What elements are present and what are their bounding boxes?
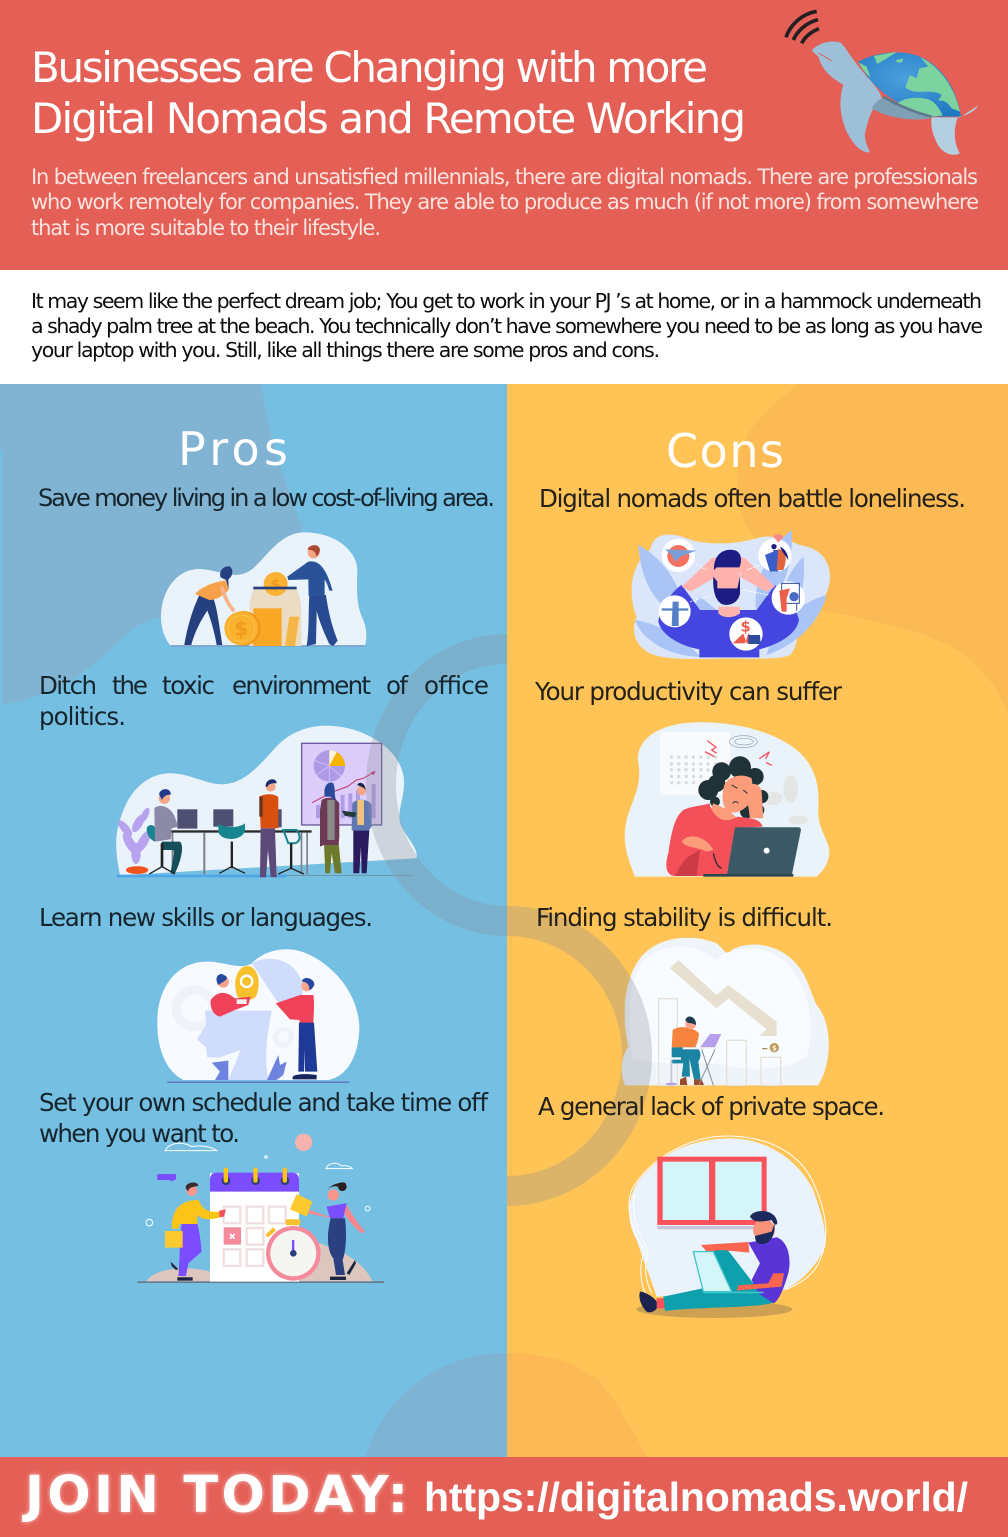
large dollar coin: $ bbox=[234, 617, 248, 641]
gears bbox=[177, 990, 291, 1045]
text: pro 2: Ditch bbox=[39, 671, 97, 700]
text block: header intro: In between freelancers and unsatisfied millennials, there are digital nomads. There are professionals bbox=[31, 165, 978, 189]
text block: dream job paragraph: your laptop with you. Still, like all things there are some pros and cons. bbox=[31, 338, 660, 362]
dollar coin: $ bbox=[772, 1043, 777, 1052]
man holding head bbox=[658, 550, 799, 657]
text: pro 4 bbox=[39, 1088, 489, 1148]
standing man bbox=[259, 779, 278, 877]
illustration: loneliness stressed man: $ bbox=[741, 619, 751, 636]
jar of coins: $ bbox=[271, 576, 281, 593]
dollar coin bbox=[762, 1043, 779, 1052]
call to action: join today: JOIN TODAY: bbox=[22, 1466, 408, 1525]
text: pro 2: office bbox=[424, 671, 489, 700]
woman with folder bbox=[290, 1182, 365, 1280]
woman figure bbox=[666, 756, 768, 876]
text: pro 2: toxic bbox=[162, 671, 215, 700]
woman pushing coin bbox=[184, 566, 234, 645]
falling arrow bbox=[670, 960, 777, 1036]
heading: Pros: Pros bbox=[178, 422, 288, 476]
panel: footer banner bbox=[0, 1457, 1008, 1537]
man dropping coin bbox=[287, 545, 338, 646]
decorative S-shaped ring bbox=[381, 649, 637, 1191]
stopwatch bbox=[265, 1219, 321, 1281]
text block: dream job paragraph: It may seem like the perfect dream job; You get to work in your PJ ’s at home, or in a hammock underneath bbox=[31, 289, 982, 313]
curly hair bbox=[698, 756, 768, 818]
icon: turtle with globe shell bbox=[786, 11, 978, 155]
text: pro 4: when you want to. bbox=[39, 1119, 240, 1148]
text: pro 2: environment bbox=[232, 671, 371, 700]
text: pro 2: the bbox=[112, 671, 148, 700]
text: pro 2: politics. bbox=[39, 702, 126, 731]
wall calendar bbox=[660, 732, 730, 795]
calendar bbox=[210, 1168, 299, 1282]
illustration: office politics team bbox=[116, 726, 417, 877]
panel: cons column bbox=[507, 384, 1008, 1457]
illustration: saving money jar bbox=[161, 532, 366, 646]
potted plant bbox=[116, 806, 154, 874]
man with laptop bbox=[639, 1211, 790, 1312]
man with tablet bbox=[342, 783, 372, 873]
panel: pros column bbox=[0, 384, 507, 1457]
large dollar coin bbox=[224, 611, 261, 646]
text block: dream job paragraph: a shady palm tree at the beach. You technically don’t have somewhere you need to be as long as you have bbox=[31, 314, 983, 338]
lightbulb bbox=[235, 966, 259, 999]
text block: dream job paragraph bbox=[31, 289, 983, 362]
title bbox=[31, 43, 746, 143]
text block: header intro: who work remotely for companies. They are able to produce as much (if not more) from somewhere bbox=[31, 190, 979, 214]
window bbox=[657, 1157, 767, 1229]
balloon shape bbox=[252, 959, 303, 1017]
whiteboard with charts bbox=[302, 743, 382, 825]
worried person at desk bbox=[664, 1016, 721, 1085]
text block: header intro bbox=[31, 165, 979, 240]
panel: header banner bbox=[0, 0, 1008, 270]
bar outlines bbox=[659, 999, 781, 1085]
panel: intro paragraph background bbox=[0, 270, 1008, 384]
illustration: schedule calendar and clock bbox=[137, 1134, 384, 1283]
stress bubbles bbox=[659, 539, 805, 651]
illustration: loneliness stressed man bbox=[632, 530, 830, 659]
wifi signal arcs bbox=[786, 11, 819, 43]
text block: header intro: that is more suitable to their lifestyle. bbox=[31, 216, 381, 240]
man pointing bbox=[165, 1183, 226, 1281]
text: pro 3: Learn new skills or languages. bbox=[39, 903, 373, 932]
illustration: head with light bulb bbox=[157, 949, 359, 1083]
seated worker bbox=[147, 789, 182, 874]
call to action: join today: JOIN TODAY: bbox=[22, 1466, 408, 1525]
man holding head top bbox=[276, 978, 317, 1079]
laptop bbox=[703, 827, 801, 877]
illustration: exhausted woman at laptop bbox=[625, 722, 829, 877]
text: pro 2 bbox=[39, 671, 489, 731]
text: pro 2: of bbox=[386, 671, 409, 700]
text: con 4: A general lack of private space. bbox=[538, 1092, 885, 1121]
text: con 1: Digital nomads often battle loneliness. bbox=[539, 484, 966, 513]
speech bubble bbox=[157, 1174, 176, 1182]
leaves bbox=[635, 530, 827, 657]
text: con 2: Your productivity can suffer bbox=[534, 677, 843, 706]
woman on head bbox=[211, 974, 251, 1017]
text: pro 1: Save money living in a low cost-of-living area. bbox=[38, 484, 495, 512]
text: pro 4: Set your own schedule and take time off bbox=[39, 1088, 489, 1117]
stress marks bbox=[705, 736, 772, 765]
globe shell bbox=[858, 52, 961, 117]
title: Businesses are Changing with more bbox=[31, 43, 708, 92]
heading: Cons: Cons bbox=[666, 424, 784, 478]
jar of coins bbox=[249, 572, 301, 646]
title: Digital Nomads and Remote Working bbox=[31, 94, 746, 143]
floor shadow bbox=[636, 1301, 792, 1318]
decorative clouds and circles bbox=[146, 1143, 370, 1226]
desk with monitors bbox=[157, 809, 312, 874]
background plant bbox=[763, 775, 808, 824]
illustration: finding stability falling chart bbox=[622, 938, 829, 1085]
call to action: url: https://digitalnomads.world/ bbox=[424, 1474, 968, 1520]
woman with coat bbox=[320, 782, 342, 873]
stylised head bbox=[197, 1011, 287, 1080]
text: con 3: Finding stability is difficult. bbox=[536, 903, 833, 932]
illustration: private space man on floor bbox=[629, 1136, 826, 1318]
